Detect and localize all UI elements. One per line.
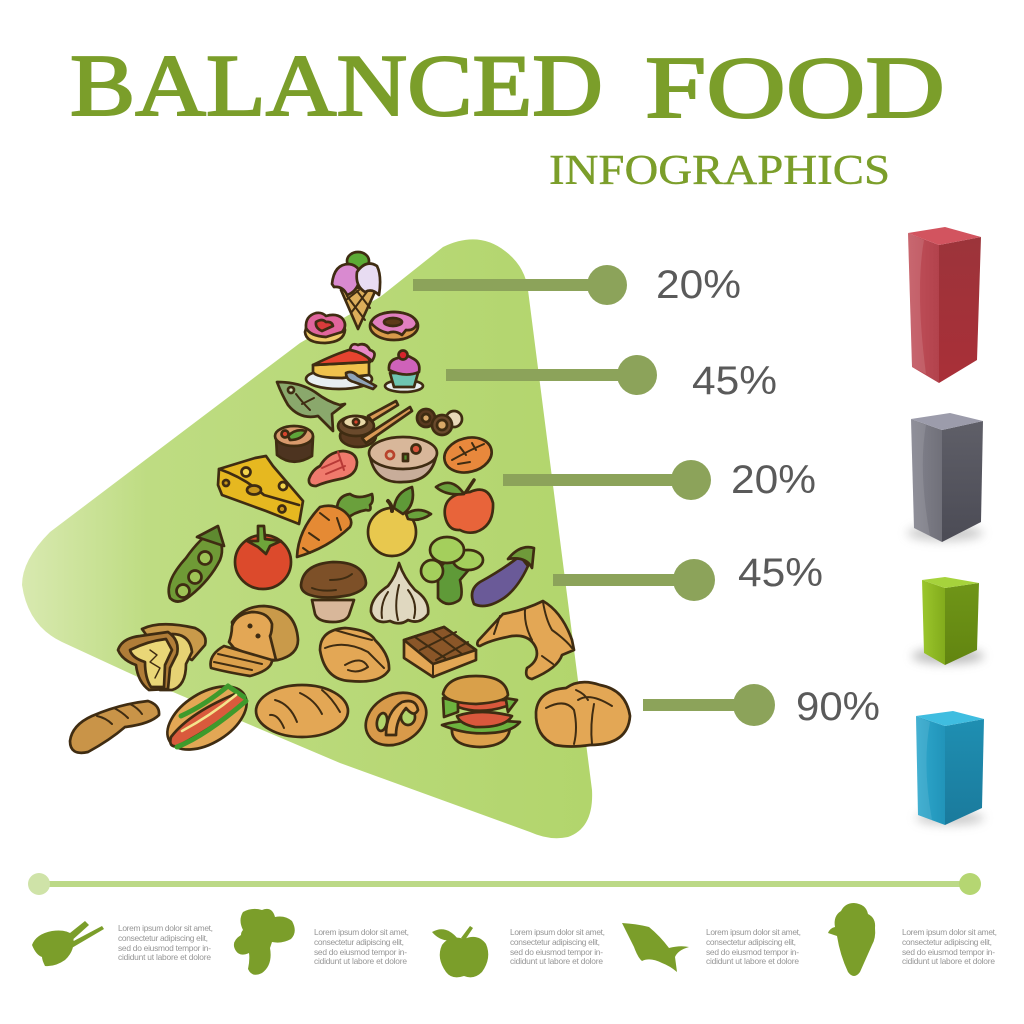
food: baguette: [70, 701, 159, 753]
food: sushi with chopsticks: [338, 401, 412, 447]
silhouette icon: broccoli: [234, 909, 295, 975]
title: FOOD: [645, 40, 945, 137]
food: peas: [169, 526, 224, 602]
food: cake slice on plate: [306, 344, 376, 389]
food: toast: [118, 624, 206, 690]
silhouette icon: ice cream: [828, 903, 875, 976]
text block 5: Lorem ipsum dolor sit amet,: [902, 927, 997, 937]
food: tomato: [235, 526, 291, 589]
text block 1: [118, 923, 213, 962]
3D bar: red: [908, 227, 981, 383]
percentage 20% middle: 20%: [731, 458, 816, 502]
food: heart cake: [305, 313, 345, 343]
food: kaiser bun: [536, 682, 630, 746]
food: sliced loaf: [211, 606, 298, 676]
text block 5: [902, 927, 997, 966]
percentage 45% lower: 45%: [738, 551, 823, 595]
text block 2: consectetur adipiscing elit,: [314, 937, 404, 947]
food: ice cream: [332, 252, 380, 329]
text block 4: consectetur adipiscing elit,: [706, 937, 796, 947]
food: apple: [436, 480, 493, 533]
food: cheese: [218, 456, 303, 524]
food: sushi piece: [275, 426, 313, 462]
text block 5: cididunt ut labore et dolore: [902, 956, 995, 966]
percentage 20% top: 20%: [656, 263, 741, 307]
text block 1: cididunt ut labore et dolore: [118, 952, 211, 962]
silhouette icon: fish: [622, 923, 689, 972]
text block 3: consectetur adipiscing elit,: [510, 937, 600, 947]
text block 3: sed do eiusmod tempor in-: [510, 947, 603, 957]
text block 2: Lorem ipsum dolor sit amet,: [314, 927, 409, 937]
food: carrot: [297, 494, 373, 557]
food: broccoli: [421, 537, 483, 604]
3D bar: grey: [907, 413, 983, 542]
text block 4: [706, 927, 801, 966]
food: salmon steak: [309, 451, 357, 486]
3D bar: green: [912, 577, 984, 665]
food: mushroom: [301, 562, 366, 622]
silhouette icon: apple: [432, 926, 488, 977]
food: hot dog: [156, 673, 258, 763]
percentage connector 1: [413, 265, 627, 305]
food: croissant: [477, 601, 574, 679]
text block 4: cididunt ut labore et dolore: [706, 956, 799, 966]
percentage 45% upper: 45%: [692, 359, 777, 403]
percentage connector 4: [553, 559, 715, 601]
food: round loaf: [256, 685, 348, 737]
text block 3: Lorem ipsum dolor sit amet,: [510, 927, 605, 937]
food: eggplant: [472, 547, 534, 606]
food: burger: [442, 676, 520, 747]
food: yellow fruit: [368, 487, 431, 556]
timeline rule: [28, 873, 981, 895]
text block 1: sed do eiusmod tempor in-: [118, 943, 211, 953]
text block 4: sed do eiusmod tempor in-: [706, 947, 799, 957]
food: cupcake: [385, 350, 423, 392]
food: donut: [370, 312, 418, 340]
food: pretzel: [356, 682, 436, 756]
food: bowl: [369, 437, 437, 482]
food: sushi rolls: [417, 409, 462, 435]
title: [70, 38, 945, 137]
3D bar: blue: [916, 711, 984, 825]
text block 1: Lorem ipsum dolor sit amet,: [118, 923, 213, 933]
text block 2: [314, 927, 409, 966]
title: BALANCED: [70, 38, 603, 135]
text block 5: consectetur adipiscing elit,: [902, 937, 992, 947]
food: waffle brownie: [404, 627, 476, 677]
percentage connector 2: [446, 355, 657, 395]
percentage connector 3: [503, 460, 711, 500]
food: swirl roll: [320, 628, 389, 682]
food: roasted fillet: [441, 433, 495, 477]
text block 1: consectetur adipiscing elit,: [118, 933, 208, 943]
percentage connector 5: [643, 684, 775, 726]
green pyramid background: [22, 239, 592, 838]
subtitle: INFOGRAPHICS: [549, 148, 890, 194]
text block 5: sed do eiusmod tempor in-: [902, 947, 995, 957]
text block 4: Lorem ipsum dolor sit amet,: [706, 927, 801, 937]
text block 2: sed do eiusmod tempor in-: [314, 947, 407, 957]
text block 2: cididunt ut labore et dolore: [314, 956, 407, 966]
percentage 90%: 90%: [796, 685, 880, 729]
silhouette icon: sushi: [32, 921, 104, 966]
food: fish: [277, 382, 345, 431]
food: garlic: [371, 563, 428, 623]
text block 3: [510, 927, 605, 966]
text block 3: cididunt ut labore et dolore: [510, 956, 603, 966]
